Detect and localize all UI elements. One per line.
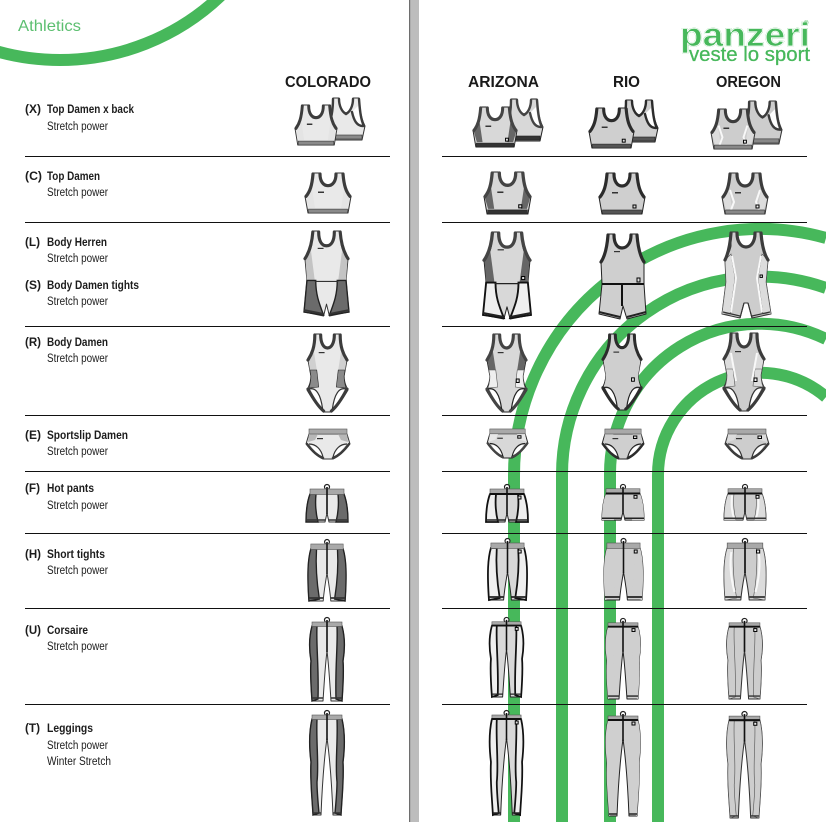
- logo: panzeri veste lo sport: [680, 16, 810, 66]
- logo: panzeri veste lo sport: panzeri: [680, 16, 810, 53]
- label F: Hot pants: [47, 483, 94, 495]
- label L: [25, 237, 108, 265]
- icon: body herren: [722, 232, 771, 318]
- logo: panzeri veste lo sport: ®: [804, 20, 809, 27]
- page gutter: [409, 0, 419, 822]
- logo: panzeri veste lo sport: panzeri: [680, 16, 810, 53]
- label U: Stretch power: [47, 641, 108, 653]
- label F: [25, 483, 108, 512]
- icon: top x back: [473, 99, 543, 147]
- label T: (T): [25, 723, 40, 735]
- column headings: OREGON: [716, 74, 781, 91]
- icon: top: [305, 173, 351, 213]
- icon: corsaire: [490, 617, 523, 697]
- label C: (C): [25, 171, 42, 183]
- logo: panzeri veste lo sport: veste lo sport: [689, 44, 810, 66]
- label T: Stretch power: [47, 740, 108, 752]
- column headings: ARIZONA: [468, 74, 539, 91]
- label F: (F): [25, 483, 40, 495]
- label E: [25, 430, 128, 458]
- icon: top x back: [711, 101, 782, 149]
- label S: (S): [25, 280, 41, 292]
- garment column: Arizona: [473, 99, 543, 815]
- label E: (E): [25, 430, 41, 442]
- label C: Stretch power: [47, 187, 108, 199]
- icon: top: [722, 173, 768, 214]
- icon: short tights: [604, 538, 643, 600]
- icon: sportslip: [306, 429, 350, 459]
- icon: body damen: [602, 334, 642, 410]
- icon: sportslip: [487, 429, 528, 458]
- icon: body herren: [599, 234, 646, 319]
- icon: top: [599, 173, 645, 214]
- column headings: RIO: [613, 74, 640, 91]
- column headings: [285, 74, 781, 91]
- label F: Stretch power: [47, 500, 108, 512]
- label X: Stretch power: [47, 121, 108, 133]
- label L: (L): [25, 237, 40, 249]
- label S: Body Damen tights: [47, 280, 139, 292]
- icon: hot pants: [602, 484, 644, 520]
- decorative arc top left: [0, 0, 293, 60]
- icon: sportslip: [725, 429, 769, 459]
- icon: body damen: [307, 334, 348, 412]
- label L: Body Herren: [47, 237, 107, 249]
- icon: short tights: [308, 540, 346, 601]
- label C: Top Damen: [47, 171, 100, 183]
- label E: Sportslip Damen: [47, 430, 128, 442]
- label H: [25, 549, 108, 577]
- icon: top x back: [295, 98, 365, 145]
- icon: top: [484, 172, 531, 214]
- label X: [25, 104, 135, 133]
- label U: (U): [25, 625, 41, 637]
- section title: Athletics: [18, 18, 81, 35]
- product labels: [25, 104, 139, 768]
- icon: corsaire: [606, 618, 640, 699]
- label T: [25, 723, 111, 768]
- icon: short tights: [724, 538, 766, 600]
- icon: body damen: [723, 333, 765, 411]
- icon: sportslip: [602, 429, 644, 459]
- label E: Stretch power: [47, 446, 108, 458]
- icon: body herren: [304, 231, 349, 316]
- label R: (R): [25, 337, 41, 349]
- label U: [25, 625, 108, 653]
- garment column: Colorado: [295, 98, 365, 815]
- icon: corsaire: [727, 618, 762, 699]
- icon: leggings: [310, 710, 344, 815]
- label H: (H): [25, 549, 41, 561]
- label T: Leggings: [47, 723, 93, 735]
- label H: Short tights: [47, 549, 105, 561]
- label R: Body Damen: [47, 337, 108, 349]
- label C: [25, 171, 108, 199]
- icon: corsaire: [310, 618, 344, 701]
- label S: Stretch power: [47, 296, 108, 308]
- icon: hot pants: [486, 484, 528, 522]
- icon: leggings: [606, 712, 640, 816]
- icon: hot pants: [306, 484, 348, 522]
- column headings: COLORADO: [285, 74, 371, 91]
- garment column: Oregon: [711, 101, 782, 818]
- label L: Stretch power: [47, 253, 108, 265]
- label U: Corsaire: [47, 625, 88, 637]
- icon: short tights: [488, 538, 527, 600]
- icon: leggings: [727, 712, 762, 818]
- label R: Stretch power: [47, 353, 108, 365]
- label S: [25, 280, 139, 308]
- icon: top x back: [589, 100, 658, 148]
- icon: leggings: [490, 710, 523, 815]
- icon: body herren: [483, 232, 531, 319]
- label H: Stretch power: [47, 565, 108, 577]
- garment column: Rio: [589, 100, 658, 816]
- running track arcs: [514, 229, 826, 822]
- label X: Top Damen x back: [47, 104, 135, 116]
- icon: body damen: [486, 334, 527, 412]
- label R: [25, 337, 108, 365]
- label T: Winter Stretch: [47, 756, 111, 768]
- label X: (X): [25, 104, 41, 116]
- icon: hot pants: [724, 484, 766, 520]
